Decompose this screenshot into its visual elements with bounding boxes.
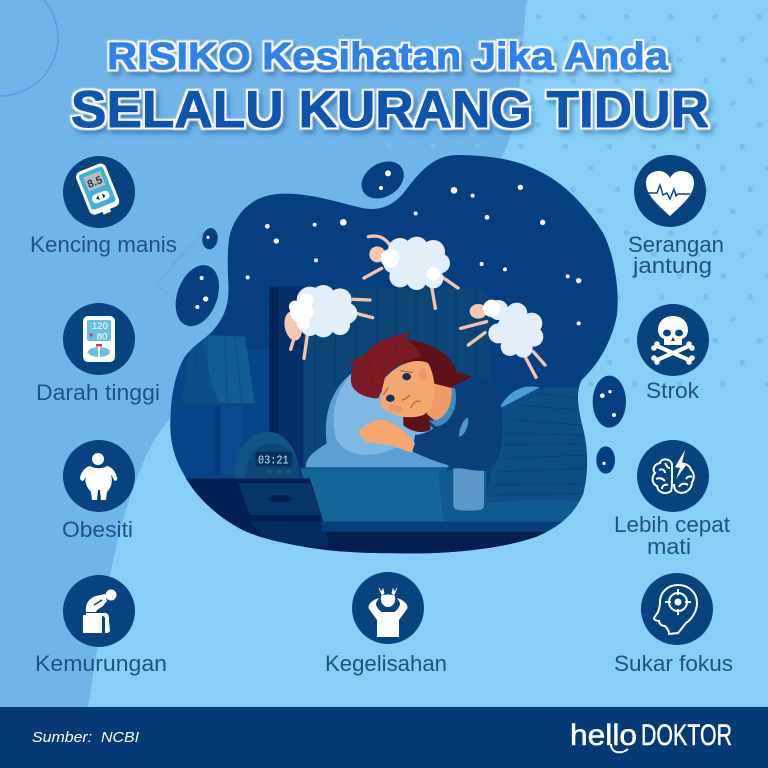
icon: blood pressure monitor [63,303,135,375]
logo: helloDOKTOR [570,719,732,752]
label: Kencing manis [30,232,177,257]
label: Darah tinggi [36,380,160,405]
title line 2: SELALU KURANG TIDUR [71,81,709,139]
label: Strok [646,378,700,403]
risk: Strok [637,304,709,403]
mattress [300,468,447,522]
blanket fold [453,468,484,511]
lamp [181,334,256,475]
eyes [402,373,411,380]
pillow [306,373,448,467]
background: thin arc top left [0,0,58,96]
background: faint polygon lines [157,233,230,303]
risk: Sukar fokus [614,573,733,676]
icon: blood pressure monitor: 80 [97,332,107,342]
logo: helloDOKTOR: hello [570,719,637,752]
risk: Kencing manis [30,156,177,257]
label: Kegelisahan [325,651,447,676]
label line 2: mati [647,534,691,559]
woman [347,332,503,471]
risk: Serangan jantung [628,155,724,278]
nightstand and floor [186,478,330,550]
label: Kemurungan [35,651,167,676]
risk: Obesiti [62,440,135,542]
neck [426,384,452,420]
source text: Sumber: NCBI [32,729,139,746]
sheep 3 [461,300,545,377]
icon: blood pressure monitor: 120 [92,321,108,332]
label: Obesiti [62,517,133,542]
room wall glow [167,350,270,483]
icon: skull and crossbones [637,304,709,376]
arm and hand [359,419,415,453]
sheep 2 [364,236,458,308]
icon: depressed person on a box [63,575,135,647]
stars [246,185,581,325]
label line 2: jantung [632,253,712,278]
headboard [269,287,490,473]
title line 1: RISIKO Kesihatan Jika Anda [107,36,669,78]
title [71,36,709,139]
risk: Kegelisahan [325,572,447,676]
sheet and duvet [501,386,540,408]
icon: brain with lightning [637,440,709,512]
logo: helloDOKTOR: DOKTOR [641,719,732,752]
hair front [347,332,422,398]
icon: obese person [63,440,135,512]
sheep 1 [282,285,373,358]
icon: head with target [641,573,713,645]
icon: glucose meter [63,156,135,228]
icon: anxious person holding head [352,572,424,644]
alarm clock: 03:21 [258,453,289,467]
illustration: sleepless woman in bed under night sky [167,150,633,563]
face [380,361,435,417]
collar [428,387,457,427]
label: Serangan [628,232,724,257]
body [413,377,503,471]
background: darker blue curved shape [0,0,527,708]
background: dot pattern [385,0,768,400]
label: Lebih cepat [614,512,730,537]
hair back [403,339,472,432]
risk: Lebih cepat mati [614,440,730,559]
main night sky blob [167,150,633,563]
alarm clock [234,432,299,478]
label: Sukar fokus [614,651,733,676]
icon: heart with ECG line [634,155,706,227]
risk: Kemurungan [35,575,167,676]
icon: glucose meter: 8.5 [86,174,104,191]
risk: Darah tinggi [36,303,160,405]
satellite blob stars [195,170,616,465]
satellite blobs with stars [168,154,626,474]
footer band [0,707,768,768]
